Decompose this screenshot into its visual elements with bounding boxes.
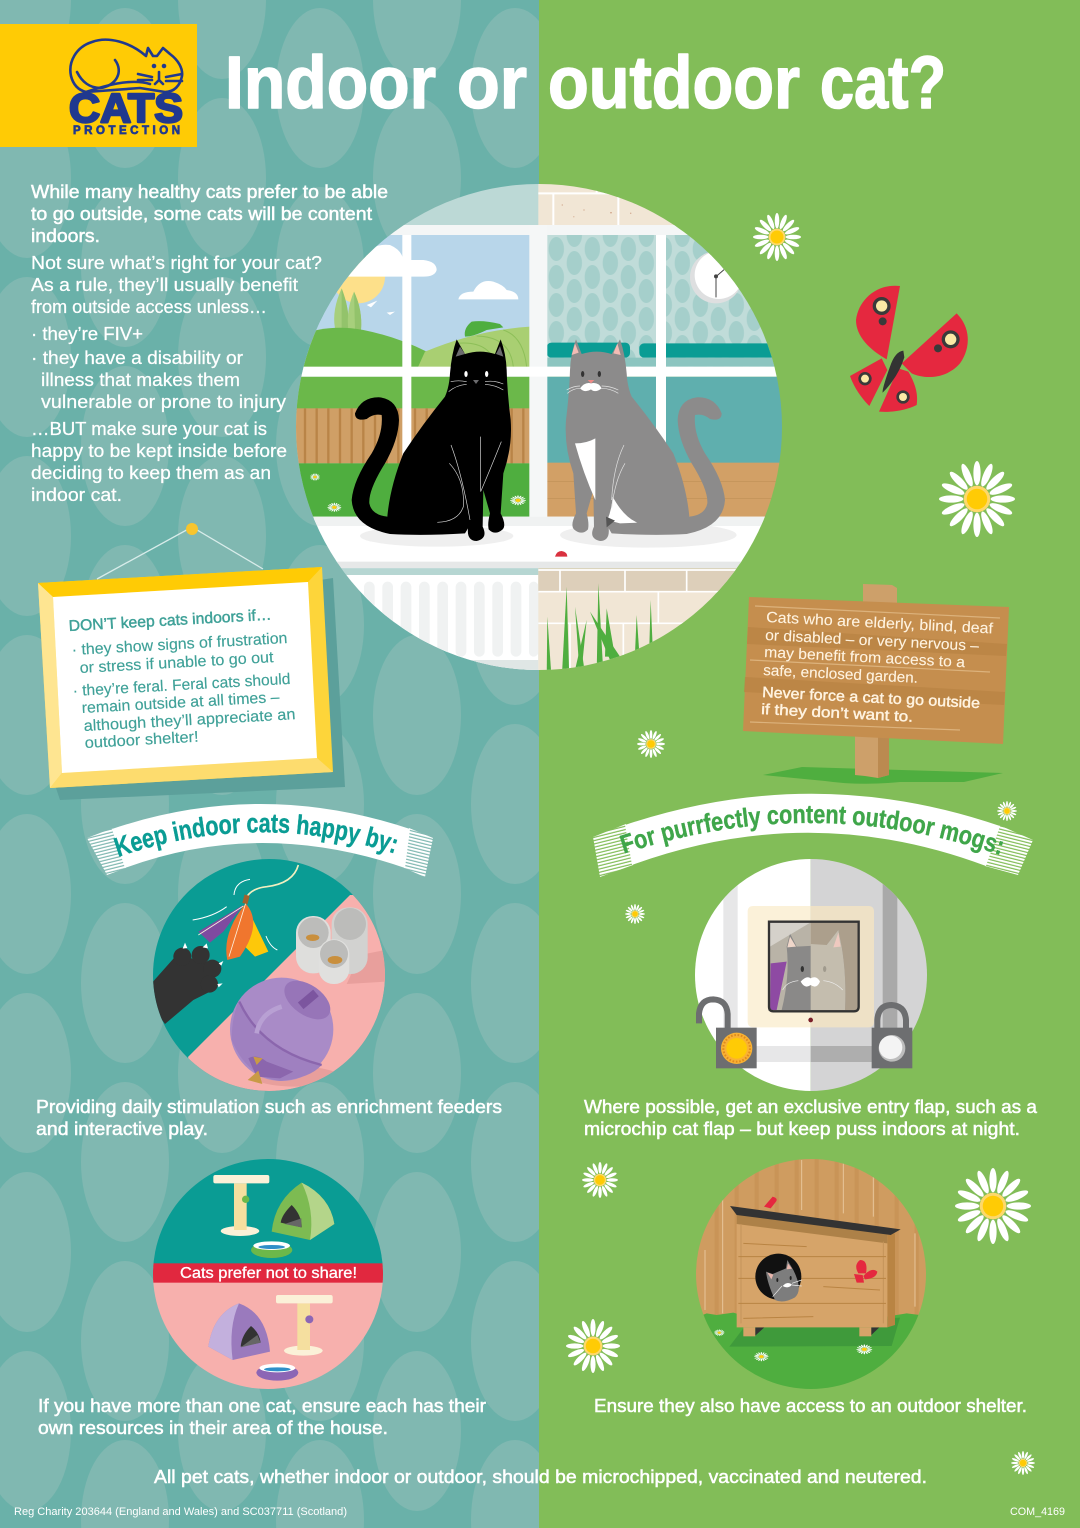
caption: own resources: own resources in their area of the house. <box>38 1417 388 1438</box>
caption: outdoor shelter: Ensure they also have access to an outdoor shelter. <box>594 1395 1027 1416</box>
banner: outdoor mogs <box>593 794 1033 877</box>
banner: outdoor mogs: For purrfectly content outdoor mogs: <box>620 806 1004 855</box>
signpost text: if they don’t want to. <box>761 701 913 726</box>
unlocked padlock <box>699 999 757 1068</box>
locked padlock <box>872 1005 912 1068</box>
sign text <box>68 607 296 752</box>
purple treat ball <box>230 973 340 1087</box>
caption: exclusive entry flap: microchip cat flap – but keep puss indoors at night. <box>584 1118 1020 1139</box>
left teal background <box>0 0 539 1528</box>
intro text block <box>31 181 388 505</box>
intro text block: to go outside, some cats will be content <box>31 203 372 224</box>
footer: charity registration: Reg Charity 203644 (England and Wales) and SC037711 (Scotland) <box>14 1506 347 1518</box>
intro text block: …BUT make sure your cat is <box>31 418 267 439</box>
title <box>225 41 946 124</box>
intro text block: Not sure what’s right for your cat? <box>31 252 322 273</box>
flap plate <box>748 906 811 1027</box>
green scratching post <box>213 1175 269 1236</box>
fence <box>690 1157 933 1320</box>
footer: reference code: COM_4169 <box>1010 1506 1065 1518</box>
sign text: or stress if unable to go out <box>79 649 275 677</box>
caption: own resources: If you have more than one cat, ensure each has their <box>38 1395 486 1416</box>
banner: keep indoor cats happy <box>87 804 433 877</box>
circle: stimulation toys <box>153 859 385 1091</box>
intro text block: from outside access unless… <box>31 296 267 317</box>
sign text: · they’re feral. Feral cats should <box>72 671 291 700</box>
signpost text: Never force a cat to go outside <box>762 684 980 712</box>
grey and white cat <box>566 339 725 541</box>
caption: daily stimulation <box>36 1096 502 1139</box>
caption: daily stimulation: and interactive play. <box>36 1118 208 1139</box>
hanging string and nail <box>97 523 263 579</box>
intro text block: indoor cat. <box>31 484 122 505</box>
logo: Cats Protection <box>0 24 197 147</box>
framed sign: don't keep cats indoors <box>38 523 345 800</box>
right half: room wall <box>538 180 792 518</box>
sign text: · they show signs of frustration <box>71 630 288 659</box>
title: Indoor <box>225 41 436 124</box>
banner: keep indoor cats happy: Keep indoor cats happy by: <box>113 814 398 857</box>
daisies on green side <box>566 213 1035 1475</box>
signpost text <box>761 609 994 726</box>
window frame <box>290 225 790 518</box>
intro text block: happy to be kept inside before <box>31 440 287 461</box>
circle: microchip cat flap <box>690 857 931 1097</box>
caption: exclusive entry flap <box>584 1096 1038 1139</box>
circle: separate resources <box>150 1157 387 1393</box>
window sill <box>290 517 790 568</box>
cat peeking from shelter <box>766 1260 802 1301</box>
caption: own resources <box>38 1395 486 1438</box>
black cat <box>352 339 511 541</box>
shelter daisies <box>714 1329 872 1361</box>
wooden shelter <box>730 1206 901 1336</box>
sign text: DON’T keep cats indoors if… <box>68 607 272 635</box>
sign text: outdoor shelter! <box>84 729 199 752</box>
band text: cats prefer not to share: Cats prefer not to share! <box>180 1265 357 1282</box>
logo wordmark: CATS <box>69 85 183 131</box>
daisies in garden <box>310 473 526 512</box>
purple food bowl <box>256 1364 298 1381</box>
feather toy <box>193 865 298 960</box>
radiator <box>342 568 538 670</box>
cat seen through flap <box>768 922 858 1011</box>
title: or <box>457 41 527 124</box>
logo wordmark: PROTECTION <box>73 125 180 137</box>
paw <box>150 943 223 1024</box>
brick wall and grass <box>538 568 737 670</box>
grass <box>704 1312 918 1389</box>
logo cat drawing <box>70 40 182 92</box>
intro text block: As a rule, they’ll usually benefit <box>31 274 298 295</box>
intro text block: deciding to keep them as an <box>31 462 271 483</box>
green food bowl <box>251 1241 292 1258</box>
signpost text: may benefit from access to a <box>764 644 966 671</box>
caption: daily stimulation: Providing daily stimulation such as enrichment feeders <box>36 1096 502 1117</box>
closing statement: All pet cats, whether indoor or outdoor, should be microchipped, vaccinated and neutered. <box>154 1466 927 1487</box>
purple cat tent <box>208 1303 270 1360</box>
title: outdoor <box>548 41 800 124</box>
right green background <box>539 0 1080 1528</box>
enrichment feeder tubes <box>296 907 385 984</box>
intro text block: While many healthy cats prefer to be able <box>31 181 388 202</box>
green cat tent <box>272 1183 334 1240</box>
intro text block: · they’re FIV+ <box>31 323 143 344</box>
intro text block: vulnerable or prone to injury <box>41 391 287 412</box>
central circle: indoor and outdoor cats at the window <box>290 180 792 682</box>
circle: outdoor shelter <box>690 1157 933 1393</box>
red band <box>150 1263 387 1283</box>
caption: exclusive entry flap: Where possible, get an exclusive entry flap, such as a <box>584 1096 1038 1117</box>
left half: garden view <box>290 180 539 680</box>
clock <box>690 251 743 303</box>
sign text: although they’ll appreciate an <box>83 706 296 735</box>
intro text block: illness that makes them <box>41 369 240 390</box>
signpost text: or disabled – or very nervous – <box>765 627 980 655</box>
wooden signpost <box>743 584 1009 784</box>
sign text: remain outside at all times – <box>81 689 280 717</box>
red butterfly <box>850 286 968 412</box>
intro text block: indoors. <box>31 225 100 246</box>
signpost text: Cats who are elderly, blind, deaf <box>766 609 994 638</box>
small butterflies <box>764 1197 877 1283</box>
purple scratching post <box>276 1295 333 1356</box>
intro text block: · they have a disability or <box>31 347 243 368</box>
signpost text: safe, enclosed garden. <box>763 662 918 687</box>
ladybird <box>555 551 567 557</box>
title: cat? <box>820 41 946 124</box>
